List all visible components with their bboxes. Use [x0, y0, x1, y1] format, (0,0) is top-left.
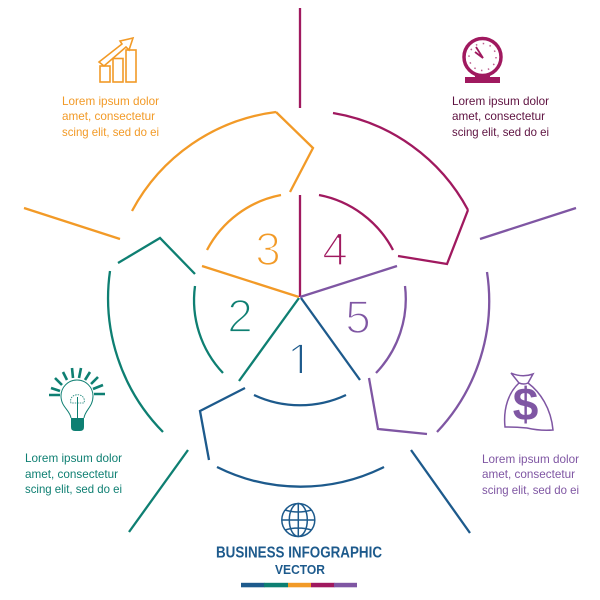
segment 4: crimson	[300, 8, 468, 297]
spoke: purple inner	[300, 266, 397, 297]
text: teal block	[25, 452, 122, 496]
text: crimson block	[452, 95, 549, 139]
spoke: blue inner	[301, 298, 360, 380]
text: crimson block: Lorem ipsum dolor	[452, 95, 549, 108]
text: orange block: Lorem ipsum dolor	[62, 95, 159, 108]
spoke: teal outer	[129, 450, 188, 532]
text: orange block	[62, 95, 159, 139]
spoke: purple outer	[480, 208, 576, 239]
bent connector: teal	[118, 238, 195, 274]
arc: purple inner	[376, 286, 406, 373]
outer arc: crimson	[333, 113, 468, 210]
arc: teal inner	[194, 286, 223, 373]
text: orange block: amet, consectetur	[62, 110, 155, 123]
subtitle: VECTOR	[275, 562, 326, 577]
number 3: 3	[255, 223, 281, 275]
text: purple block: amet, consectetur	[482, 468, 575, 481]
outer arc: purple	[437, 272, 489, 432]
number 1: 1	[287, 334, 313, 386]
arc: orange inner	[207, 195, 281, 250]
spoke: blue outer	[411, 450, 470, 533]
icon: money bag: $	[513, 378, 538, 430]
bent connector: orange	[276, 112, 313, 192]
segment 5: purple	[300, 208, 576, 434]
number 2: 2	[227, 290, 253, 342]
spoke: crimson outer	[299, 8, 301, 108]
icon: rising bar chart	[99, 38, 136, 82]
text: teal block: scing elit, sed do ei	[25, 483, 122, 496]
bent connector: crimson	[398, 210, 468, 264]
spoke: orange inner	[202, 266, 299, 297]
icon: clock	[464, 38, 501, 83]
segment 1: blue	[200, 298, 470, 533]
text: purple block	[482, 453, 579, 497]
number 5: 5	[345, 291, 371, 343]
spoke: teal inner	[239, 298, 299, 381]
text: teal block: Lorem ipsum dolor	[25, 452, 122, 465]
title: BUSINESS INFOGRAPHIC	[216, 544, 382, 562]
outer arc: teal	[108, 271, 163, 432]
text: purple block: scing elit, sed do ei	[482, 484, 579, 497]
bent connector: blue	[200, 388, 245, 460]
icon: light bulb	[49, 368, 105, 431]
colour bar	[241, 583, 357, 587]
segment 3: orange	[24, 112, 313, 297]
arc: crimson inner	[319, 195, 393, 250]
bent connector: purple	[369, 378, 427, 434]
text: crimson block: amet, consectetur	[452, 110, 545, 123]
icon: globe	[282, 504, 315, 536]
text: purple block: Lorem ipsum dolor	[482, 453, 579, 466]
icon: money bag	[505, 373, 553, 430]
spoke: orange outer	[24, 208, 120, 239]
outer arc: orange	[132, 112, 276, 211]
text: orange block: scing elit, sed do ei	[62, 126, 159, 139]
number 4: 4	[322, 223, 348, 275]
spoke: crimson inner	[299, 195, 301, 297]
arc: blue inner	[254, 395, 346, 405]
segment 2: teal	[108, 238, 299, 532]
text: crimson block: scing elit, sed do ei	[452, 126, 549, 139]
outer arc: blue	[217, 467, 384, 487]
text: teal block: amet, consectetur	[25, 468, 118, 481]
